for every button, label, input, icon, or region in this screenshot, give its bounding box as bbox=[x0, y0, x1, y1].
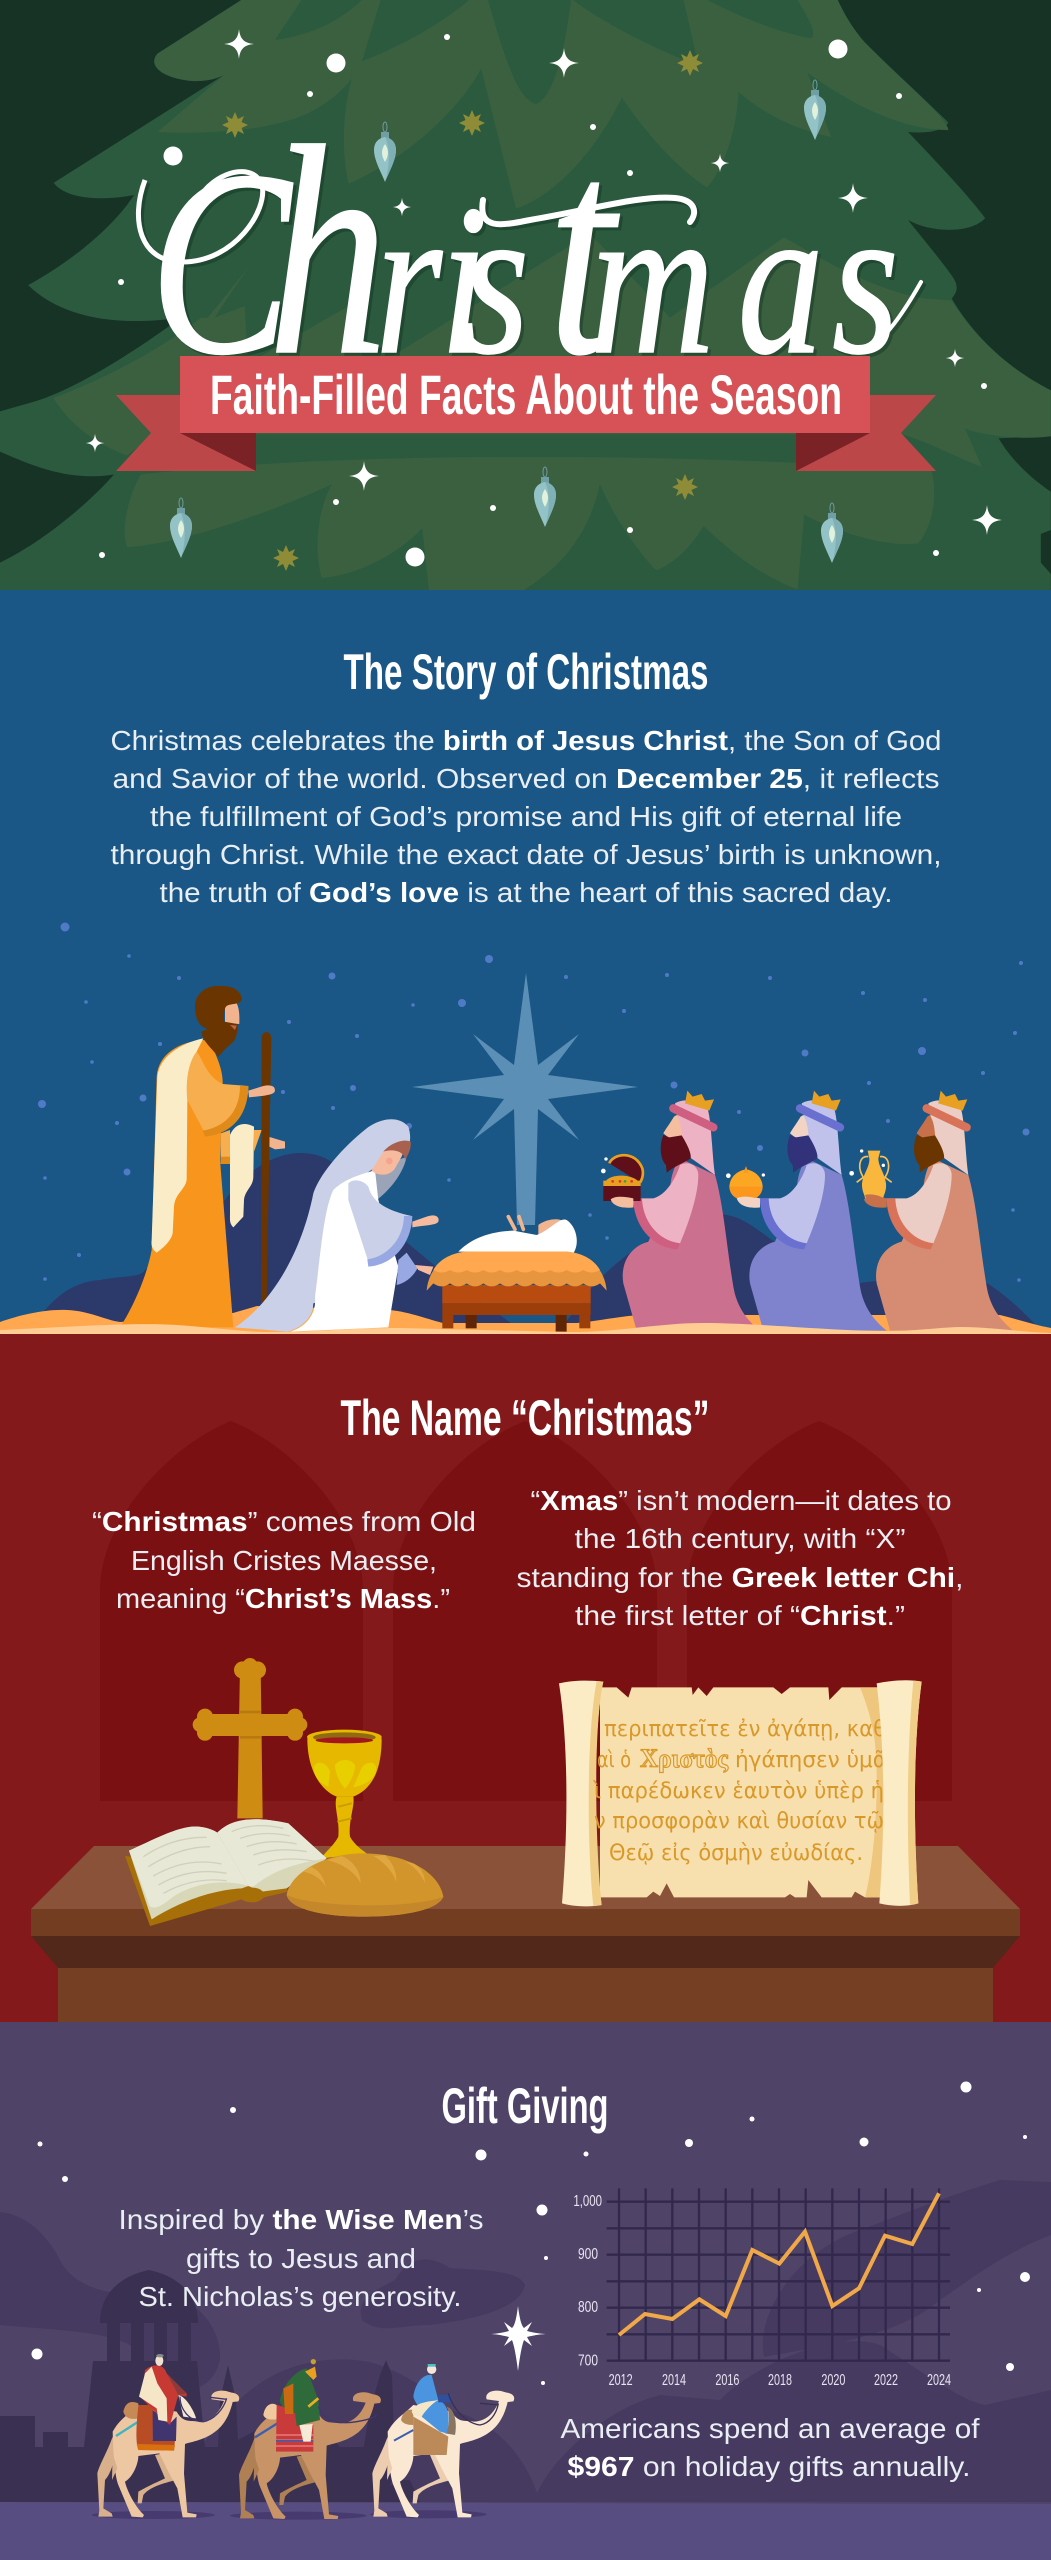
camel caravan bbox=[92, 2354, 514, 2520]
snow dots bbox=[32, 2082, 1030, 2385]
icon: chalice bbox=[307, 1730, 382, 1858]
wise men text: St. Nicholas’s generosity. bbox=[138, 2281, 462, 2312]
icon: bread bbox=[287, 1853, 443, 1917]
y axis labels: 1,000 bbox=[573, 2193, 602, 2210]
spending text: Americans spend an average of bbox=[560, 2413, 980, 2444]
panel: Gift Giving bbox=[0, 2022, 1051, 2560]
title: Christmas: i bbox=[440, 162, 488, 399]
Mary bbox=[235, 1119, 439, 1332]
y axis labels: 800 bbox=[578, 2299, 598, 2316]
y axis labels bbox=[573, 2193, 602, 2370]
spending text bbox=[560, 2413, 980, 2482]
ribbon banner bbox=[116, 356, 936, 471]
manger with baby bbox=[427, 1217, 607, 1332]
king 3 with vase bbox=[864, 1091, 1013, 1331]
title: Christmas: h bbox=[268, 85, 388, 417]
Greek verse: περιπατεῖτε ἐν ἀγάπῃ, καθ bbox=[604, 1717, 886, 1742]
snow dots bbox=[99, 34, 987, 566]
title: Christmas: C bbox=[150, 116, 294, 409]
title: Christmas: s bbox=[462, 162, 529, 399]
altar items bbox=[125, 1658, 443, 1926]
y axis labels: 900 bbox=[578, 2246, 598, 2263]
heading: Gift Giving bbox=[442, 2078, 608, 2134]
panel: The Story of Christmas bbox=[0, 590, 1051, 1336]
clouds and hills bbox=[0, 2180, 1051, 2502]
spending text: $967 on holiday gifts annually. bbox=[568, 2451, 970, 2482]
title: Christmas: t bbox=[548, 85, 623, 417]
wise men text: Inspired by the Wise Men ’s bbox=[118, 2204, 484, 2235]
king 1 with chest bbox=[601, 1091, 760, 1331]
night sky dots bbox=[38, 922, 1030, 1282]
king 2 with orb bbox=[737, 1091, 887, 1331]
x axis labels bbox=[609, 2372, 951, 2389]
x axis labels: 2018 bbox=[768, 2372, 792, 2389]
sparkles and gold stars bbox=[86, 29, 1002, 571]
title: Christmas: r bbox=[375, 162, 443, 399]
x axis labels: 2020 bbox=[821, 2372, 845, 2389]
hills bbox=[30, 1153, 1040, 1330]
Greek verse: Θεῷ εἰς ὀσμὴν εὐωδίας. bbox=[609, 1841, 863, 1866]
panel: The Name Christmas bbox=[0, 1334, 1051, 2024]
left roller bbox=[559, 1681, 603, 1906]
tree illustration bbox=[0, 0, 1051, 591]
grid bbox=[607, 2188, 950, 2362]
camel 2 with rider in green bbox=[239, 2359, 381, 2519]
spending line bbox=[619, 2193, 939, 2335]
star of Bethlehem bbox=[412, 973, 638, 1225]
left text block: “Christmas ” comes from Old bbox=[92, 1506, 476, 1537]
x axis labels: 2024 bbox=[927, 2372, 951, 2389]
wise men text: gifts to Jesus and bbox=[186, 2243, 416, 2274]
x axis labels: 2012 bbox=[609, 2372, 633, 2389]
Greek verse bbox=[592, 1717, 887, 1866]
left text block bbox=[92, 1506, 476, 1614]
right text block: the 16th century, with “X” bbox=[574, 1523, 906, 1554]
title: Christmas: a bbox=[738, 162, 824, 399]
ornaments bbox=[170, 80, 843, 563]
wise men text bbox=[118, 2204, 484, 2312]
Joseph bbox=[120, 986, 285, 1327]
title: Christmas bbox=[138, 85, 921, 417]
distant city silhouette bbox=[0, 2270, 420, 2502]
shadows bbox=[92, 2510, 487, 2520]
story paragraph: the truth of God’s love is at the heart of this sacred day. bbox=[160, 877, 892, 908]
heading: The Story of Christmas bbox=[344, 644, 708, 700]
icon: open book bbox=[125, 1819, 327, 1926]
scroll with Greek text bbox=[559, 1681, 883, 1906]
camel 3 with rider in blue bbox=[372, 2364, 514, 2517]
panel: hero tree header bbox=[0, 0, 1051, 591]
heading: The Name “Christmas” bbox=[340, 1390, 710, 1446]
icon: cross bbox=[193, 1658, 307, 1818]
x axis labels: 2022 bbox=[874, 2372, 898, 2389]
right text block bbox=[517, 1485, 964, 1631]
Greek verse: ἠγάπησεν ὑμᾶ bbox=[735, 1748, 887, 1773]
story paragraph: the fulfillment of God’s promise and His gift of eternal life bbox=[150, 801, 902, 832]
parchment bbox=[600, 1687, 883, 1897]
altar table bbox=[31, 1846, 1020, 2022]
title: Christmas: s bbox=[832, 162, 899, 399]
ground bbox=[0, 2502, 1051, 2560]
y axis labels: 700 bbox=[578, 2353, 598, 2370]
three kings bbox=[601, 1091, 1013, 1331]
icon: guiding star bbox=[489, 2306, 548, 2371]
arched windows bbox=[100, 1421, 952, 1801]
Greek verse: αὶ ὁ bbox=[597, 1748, 631, 1773]
left text block: meaning “Christ’s Mass.” bbox=[116, 1583, 450, 1614]
Greek verse: ν προσφορὰν καὶ θυσίαν τῷ bbox=[594, 1809, 884, 1834]
story paragraph: and Savior of the world. Observed on December 25 , it reflects bbox=[112, 763, 940, 794]
line chart: holiday spending bbox=[573, 2188, 951, 2389]
x axis labels: 2014 bbox=[662, 2372, 686, 2389]
Greek verse: ὶ παρέδωκεν ἑαυτὸν ὑπὲρ ἡ bbox=[592, 1779, 884, 1804]
sand bbox=[0, 1306, 1051, 1334]
story paragraph: through Christ. While the exact date of Jesus’ birth is unknown, bbox=[110, 839, 941, 870]
right text block: standing for the Greek letter Chi , bbox=[517, 1562, 964, 1593]
camel 1 with rider in red bbox=[97, 2354, 239, 2517]
Greek verse: Χριστὸς bbox=[640, 1744, 729, 1773]
story paragraph bbox=[110, 725, 942, 908]
title: Christmas: m bbox=[590, 162, 715, 399]
x axis labels: 2016 bbox=[715, 2372, 739, 2389]
story paragraph: Christmas celebrates the birth of Jesus Christ , the Son of God bbox=[110, 725, 942, 756]
right text block: the first letter of “ Christ.” bbox=[575, 1600, 905, 1631]
right text block: “Xmas” isn’t modern—it dates to bbox=[530, 1485, 952, 1516]
left text block: English Cristes Maesse, bbox=[131, 1545, 437, 1576]
nativity: Joseph, Mary, manger bbox=[120, 986, 607, 1332]
right roller bbox=[877, 1680, 922, 1906]
foreground sand bbox=[0, 1323, 1051, 1336]
